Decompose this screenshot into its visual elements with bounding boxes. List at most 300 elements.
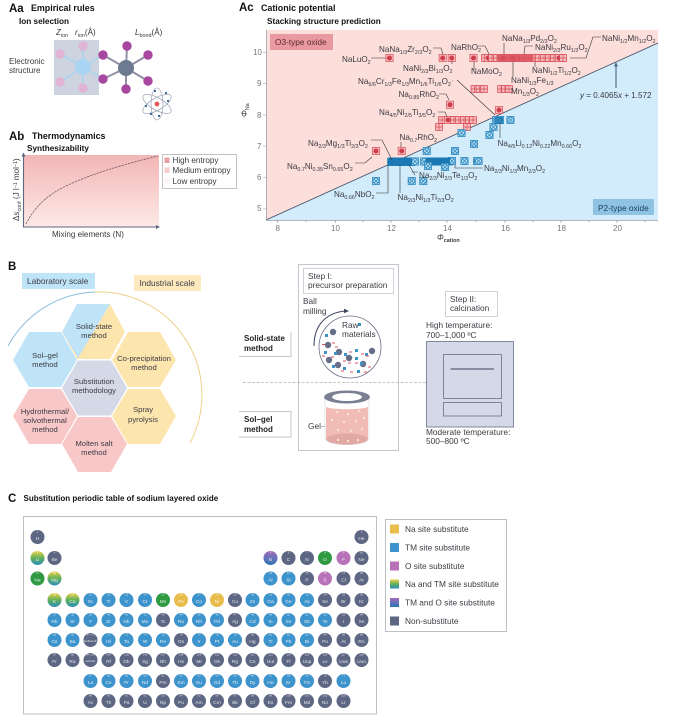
subheading: Synthesizability: Synthesizability (27, 144, 89, 153)
label: Sol-gel method: Sol–gel (244, 415, 272, 424)
row 5: Zr (106, 619, 111, 625)
data labels: NaNi1/3Fe1/3 (511, 76, 553, 87)
actinide row: Np (160, 700, 166, 706)
row 7: Lv (322, 659, 328, 665)
row 5: 41 (125, 612, 128, 616)
row 6: 72 (107, 632, 110, 636)
text: x axis label: Mixing elements (N) (52, 230, 124, 239)
row 7: 113 (268, 652, 273, 656)
hex: hydrothermal: method (32, 425, 58, 434)
actinide row: 92 (143, 694, 147, 698)
row 5: 39 (89, 612, 92, 616)
row 5: Sn (286, 619, 292, 625)
label: Industrial scale (134, 275, 201, 291)
row 7: 107 (161, 652, 166, 656)
text: raw materials: materials (342, 329, 376, 339)
label: Step II: calcination (450, 303, 490, 313)
row 7: 88 (71, 652, 74, 656)
lanthanide row: Ce (105, 680, 112, 686)
leader lines (355, 37, 618, 193)
lanthanide row: Ho (267, 680, 274, 686)
subheading: Stacking structure prediction: Stacking structure prediction (267, 17, 381, 26)
hex: hydrothermal: Hydrothermal/ (21, 407, 70, 416)
row 6: 85 (342, 632, 345, 636)
actinide row: Ac (88, 700, 94, 706)
row 4: Zn (250, 599, 256, 605)
heading: Ab Thermodynamics (9, 131, 106, 143)
legend: entropy: Low entropy (172, 177, 218, 186)
row 7: 106 (143, 652, 148, 656)
row 6: Pb (286, 639, 292, 645)
row 2: B (269, 557, 272, 563)
data labels: Na5/6Cr1/3Fe1/3Mn1/6Ti1/6O2 (358, 77, 451, 88)
data labels: Na2/3Ni2/3Te1/3O2 (419, 171, 477, 182)
row 3: Cl (341, 578, 346, 584)
actinide row: 90 (107, 694, 110, 698)
row 4: 22 (107, 592, 110, 596)
row 7: Uus (339, 659, 348, 665)
red markers (372, 54, 566, 155)
row 5: Rh (196, 619, 202, 625)
subheading: Ion selection: Ion selection (19, 17, 69, 26)
row 7: Ra (69, 659, 76, 665)
text: Zion rion Lbond labels: rion(Å) (75, 28, 96, 39)
row 1: H (36, 536, 40, 542)
text: moderate temperature: Moderate temperature: (426, 427, 510, 437)
row 1 (30, 530, 368, 544)
lanthanide row: 65 (233, 674, 237, 678)
row 7: Uut (267, 659, 275, 665)
row 7: 105 (124, 652, 129, 656)
data labels: Na2/3Ni1/3Ti2/3O2 (398, 193, 454, 204)
row 4: 30 (251, 592, 254, 596)
row 6 (48, 632, 368, 647)
actinide row: Bk (232, 700, 238, 706)
row 5: 47 (233, 612, 237, 616)
icon: gel beaker (308, 390, 370, 445)
row 6: Pt (215, 639, 220, 645)
row 2: Ne (358, 557, 365, 563)
row 7: Db (123, 659, 130, 665)
row 4: Co (196, 599, 202, 605)
row 6: Bi (305, 639, 309, 645)
row 5: Rb (51, 619, 58, 625)
lanthanide row: 71 (342, 674, 345, 678)
row 6: Rn (358, 639, 365, 645)
row 2: F (342, 557, 345, 563)
row 7: Bh (160, 659, 166, 665)
row 5: 53 (342, 612, 345, 616)
actinide row: 89 (89, 694, 92, 698)
lanthanide row: 63 (197, 674, 201, 678)
row 7: 109 (197, 652, 202, 656)
row 4: Ni (215, 599, 219, 605)
actinide row: 93 (161, 694, 165, 698)
row 5: 46 (215, 612, 219, 616)
actinide row: Cm (213, 700, 221, 706)
panel: synthesis process (239, 264, 514, 450)
row 6: Ba (70, 639, 76, 645)
actinide row: Cf (250, 700, 256, 706)
row 6: 80 (251, 632, 254, 636)
data labels: Na4/5Ni2/5Ti3/5O2 (379, 108, 435, 119)
label: Solid-state method (239, 332, 291, 356)
lanthanide row: 60 (143, 674, 147, 678)
row 4: Se (322, 599, 328, 605)
row 2: Li (36, 557, 39, 563)
hex: substitution methodology (62, 360, 127, 416)
heading: Ac Cationic potential (239, 2, 335, 14)
row 7: Uuo (357, 659, 366, 665)
row 6: 73 (125, 632, 128, 636)
label: Step I (304, 268, 394, 294)
row 3 (30, 571, 368, 586)
text: ball milling: Ball (303, 296, 317, 306)
heading: C: C (8, 493, 16, 505)
row 2: 4 (54, 550, 56, 554)
lanthanide row: 66 (251, 674, 254, 678)
hex: sol-gel (13, 332, 77, 387)
lanthanide row: Nd (142, 680, 148, 686)
actinide row: Pa (124, 700, 130, 706)
axis tick labels: 20 (613, 224, 622, 233)
text: Zion rion Lbond labels: Lbond(Å) (135, 28, 163, 39)
actinide row: Es (268, 700, 274, 706)
row 7: Mt (196, 659, 202, 665)
lanthanide row: 58 (107, 674, 110, 678)
row 2: 8 (324, 550, 326, 554)
hex: solid-state: Solid-state (76, 322, 112, 331)
label: Laboratory scale: Laboratory scale (27, 276, 89, 286)
heading: Ab Thermodynamics: Ab (9, 131, 24, 143)
text: high temperature: High temperature: (426, 320, 492, 330)
row 2: 9 (343, 550, 345, 554)
hex: molten salt: method (81, 448, 107, 457)
row 6: lanthanide (84, 639, 97, 643)
row 6: 82 (287, 632, 290, 636)
row 7: 117 (341, 652, 346, 656)
data labels: NaNi1/2Mn1/2O2 (602, 34, 656, 45)
row 4: Ca (69, 599, 76, 605)
row 5: I (343, 619, 344, 625)
lanthanide row: Yb (322, 680, 328, 686)
actinide row: 101 (305, 694, 310, 698)
legend: substitution types: Non-substitute (405, 616, 459, 626)
row 3: 17 (342, 571, 345, 575)
row 7: Rg (232, 659, 238, 665)
row 5: 48 (251, 612, 254, 616)
hex: hydrothermal (13, 389, 77, 444)
O3 box (270, 34, 333, 50)
label: Sol-gel method (239, 412, 291, 437)
row 4: Ti (107, 599, 110, 605)
lanthanide row: 69 (305, 674, 309, 678)
axis tick labels: 10 (253, 48, 262, 57)
heading: B: B (8, 261, 16, 273)
row 6: Hf (106, 639, 112, 645)
divider (243, 382, 426, 384)
actinide row: No (322, 700, 328, 706)
text: gel: Gel (308, 421, 321, 431)
row 5: Xe (359, 619, 365, 625)
legend: entropy: Medium entropy (172, 166, 231, 175)
row 3: 11 (36, 571, 39, 575)
axis titles: ΦNa (240, 103, 251, 117)
data labels: Na2/3Mg1/3Ti2/3O2 (308, 139, 368, 150)
hex: co-precipitation: Co-precipitation (117, 354, 171, 363)
legend: entropy: High entropy (172, 156, 219, 165)
row 2: 7 (306, 550, 308, 554)
actinide row: 91 (125, 694, 128, 698)
row 5: 49 (269, 612, 272, 616)
data labels: Mn1/3O2 (511, 87, 539, 98)
P2 box (593, 199, 654, 215)
row 4: Ga (267, 599, 274, 605)
axis tick labels: 9 (257, 79, 262, 88)
heading: C: Substitution periodic table of sodium layered oxide (24, 494, 219, 503)
actinide row: 95 (197, 694, 201, 698)
heading: Aa Empirical rules: Aa (9, 3, 24, 15)
text: high temperature: 700–1,000 ºC (426, 330, 477, 340)
actinide row: 99 (269, 694, 272, 698)
legend: substitution types (386, 520, 506, 632)
row 4: 36 (360, 592, 363, 596)
lanthanide row: Pm (159, 680, 167, 686)
data labels: NaNi2/3Bi1/3O2 (403, 64, 452, 75)
row 4: As (304, 599, 310, 605)
row 3: 15 (305, 571, 309, 575)
hex: substitution methodology: methodology (72, 386, 116, 395)
hex: hydrothermal: solvothermal (23, 416, 67, 425)
actinide row: Md (304, 700, 311, 706)
row 7: Fr (52, 659, 57, 665)
row 6: 76 (179, 632, 183, 636)
row 4: Br (341, 599, 346, 605)
row 3: S (323, 578, 327, 584)
row 5: Nb (123, 619, 130, 625)
data labels: NaNi2/3Ru1/3O2 (535, 43, 588, 54)
row 7: 108 (179, 652, 184, 656)
label: Step II: Step II: (450, 294, 476, 304)
data labels: Na2/3Ni1/3Mn2/3O2 (484, 164, 545, 175)
row 2 (30, 550, 368, 565)
row 7: Cn (249, 659, 256, 665)
row 6: At (341, 639, 346, 645)
lanthanide row: 67 (269, 674, 272, 678)
row 5: 37 (53, 612, 56, 616)
row 6: 79 (233, 632, 237, 636)
row 4: K (53, 599, 57, 605)
row 2: 6 (288, 550, 290, 554)
row 6: 83 (305, 632, 309, 636)
row 4: Ge (285, 599, 292, 605)
lanthanide row: Er (286, 680, 291, 686)
heading: Ab Thermodynamics: Thermodynamics (32, 131, 106, 141)
label: Step II (446, 292, 498, 316)
panel: step I (298, 264, 398, 450)
row 6: 57–71 (87, 632, 95, 636)
row 3: P (305, 578, 309, 584)
row 6: Re (160, 639, 166, 645)
axis tick labels: 5 (257, 204, 262, 213)
data labels: Na0.7RhO2 (400, 133, 437, 144)
data labels: Na0.85RhO2 (398, 90, 439, 101)
actinide row: 98 (251, 694, 254, 698)
text: electronic structure: structure (9, 66, 41, 75)
row 5: Te (322, 619, 328, 625)
label: Solid-state method: method (244, 344, 273, 353)
lanthanide row: Lu (341, 680, 346, 686)
lanthanide row: Tb (232, 680, 238, 686)
periodic table (24, 516, 376, 714)
actinide row: 100 (286, 694, 291, 698)
data labels: NaNi1/2Ti1/2O2 (532, 66, 581, 77)
lanthanide row: 70 (323, 674, 327, 678)
row 3: 16 (323, 571, 327, 575)
label: Step I: Step I: (308, 271, 332, 281)
text: y axis label: Δsconf (J l−1 mol−1) (12, 158, 23, 221)
icon: atom (140, 88, 174, 120)
row 5: Cd (249, 619, 256, 625)
row 7: Rf (106, 659, 112, 665)
row 3: Ar (359, 578, 364, 584)
data labels: Na0.7Ni0.35Sn0.65O2 (287, 162, 353, 173)
axis tick labels: 7 (257, 142, 262, 151)
heading: Aa Empirical rules: Empirical rules (31, 3, 95, 13)
row 6: Po (322, 639, 328, 645)
row 5: 50 (287, 612, 290, 616)
actinide row: 94 (179, 694, 183, 698)
row 2: 10 (360, 550, 363, 554)
row 6: Tl (268, 639, 272, 645)
legend: entropy (162, 154, 236, 188)
row 7: 104 (106, 652, 111, 656)
legend: substitution types: Na site substitute (405, 524, 469, 534)
hex: molten salt (62, 417, 127, 472)
row 4: 19 (53, 592, 56, 596)
data labels: y = 0.4065x + 1.572 (579, 91, 652, 100)
lanthanide row: Eu (196, 680, 202, 686)
heading: Ac Cationic potential: Cationic potential (261, 3, 335, 13)
actinide row: 96 (215, 694, 219, 698)
row 7: 116 (323, 652, 328, 656)
data labels: NaMoO2 (471, 67, 502, 78)
row 5: Ru (178, 619, 184, 625)
row 5: 42 (143, 612, 147, 616)
row 4: Fe (178, 599, 184, 605)
row 6: 78 (215, 632, 219, 636)
row 4: 28 (215, 592, 219, 596)
row 7: 89–103 (86, 652, 96, 656)
row 7: 111 (233, 652, 238, 656)
chart: mixing entropy curve (12, 152, 160, 239)
row 3: Al (268, 578, 273, 584)
row 7: 115 (305, 652, 310, 656)
text: moderate temperature: 500–800 ºC (426, 436, 470, 446)
row 4: 31 (269, 592, 272, 596)
actinide row: Th (106, 700, 112, 706)
row 3: 14 (287, 571, 290, 575)
row 4: Mn (160, 599, 167, 605)
row 7: 112 (250, 652, 255, 656)
row 5: 44 (179, 612, 183, 616)
text: Zion rion Lbond labels: Zion (55, 28, 68, 39)
panel: hexagon methods (8, 273, 202, 472)
hex: spray pyrolysis: Spray (133, 405, 153, 414)
hex: molten salt: Molten salt (75, 439, 113, 448)
row 3: 13 (269, 571, 272, 575)
label: Industrial scale: Industrial scale (140, 278, 195, 288)
row 2: C (287, 557, 291, 563)
lanthanide row: 64 (215, 674, 219, 678)
axis tick labels: 12 (387, 224, 396, 233)
row 5: 45 (197, 612, 201, 616)
axis tick labels: 14 (443, 224, 452, 233)
row 7: Fl (286, 659, 290, 665)
row 6: Hg (249, 639, 256, 645)
row 7: 118 (359, 652, 364, 656)
row 6: Cs (52, 639, 58, 645)
row 5: 51 (305, 612, 309, 616)
icon: ball mill jar (319, 316, 381, 378)
row 7: actinide (86, 659, 96, 663)
label: Step I: precursor preparation (308, 280, 388, 290)
heading: Aa Empirical rules (9, 3, 95, 15)
row 2: N (305, 557, 309, 563)
row 3: Si (286, 578, 291, 584)
axis titles (240, 103, 460, 244)
lanthanide row: 68 (287, 674, 290, 678)
row 4: 27 (197, 592, 201, 596)
row 7: Uup (303, 659, 312, 665)
row 5: Y (89, 619, 93, 625)
label: Sol-gel method: method (244, 425, 273, 434)
lanthanide row: Dy (250, 680, 256, 686)
row 6: Au (232, 639, 238, 645)
icon: furnace (426, 342, 514, 427)
lanthanide row: Sm (177, 680, 185, 686)
row 6: Os (178, 639, 185, 645)
row 2: Be (52, 557, 58, 563)
legend: substitution types: O site substitute (405, 561, 465, 571)
row 6: W (143, 639, 148, 645)
axis titles: Φcation (437, 233, 460, 244)
actinide row: 103 (341, 694, 346, 698)
row 5: 54 (360, 612, 363, 616)
data labels: NaRhO2 (451, 43, 481, 54)
text: ball milling: milling (303, 306, 327, 316)
row 5: Sr (70, 619, 75, 625)
axis tick labels: 8 (257, 111, 262, 120)
row 5: Tc (161, 619, 166, 625)
hex: spray pyrolysis: pyrolysis (128, 415, 158, 424)
row 4: 29 (233, 592, 237, 596)
row 4: 25 (161, 592, 165, 596)
arrow: milling direction (314, 309, 349, 346)
row 4: Sc (88, 599, 94, 605)
data labels: Na4/5Li0.12Ni0.22Mn0.66O2 (498, 139, 581, 150)
legend: substitution types: TM site substitute (405, 542, 470, 552)
axis tick labels: 8 (276, 224, 280, 233)
axis tick labels (253, 48, 622, 233)
lanthanide row: 57 (89, 674, 92, 678)
lanthanide row: 62 (179, 674, 183, 678)
diagram: electronic structure (9, 28, 174, 120)
row 6: 84 (323, 632, 327, 636)
actinide row: 97 (233, 694, 237, 698)
hex: co-precipitation (112, 332, 176, 387)
row 4: 24 (143, 592, 147, 596)
